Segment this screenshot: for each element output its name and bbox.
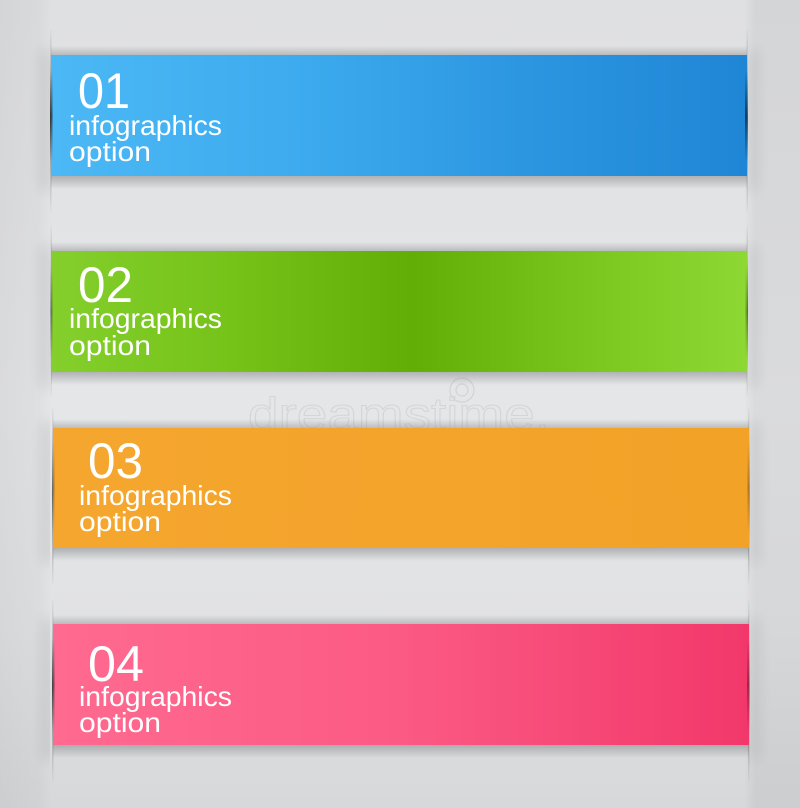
label — [79, 480, 232, 537]
number 03: 03 — [88, 433, 143, 489]
label: option — [69, 136, 151, 167]
panel: option 04 — [52, 615, 750, 758]
number 02: 02 — [78, 257, 133, 313]
bar: orange — [53, 428, 749, 548]
label: option — [69, 330, 151, 361]
label: infographics — [79, 480, 232, 511]
label: infographics — [69, 110, 222, 141]
panel: option 03 — [52, 419, 750, 561]
label: option — [79, 707, 161, 738]
panel: option 02 — [50, 242, 748, 385]
number 04: 04 — [88, 636, 144, 692]
label: infographics — [79, 681, 232, 712]
label: option — [79, 506, 161, 537]
bar: blue — [51, 55, 747, 176]
bar: green — [51, 251, 747, 372]
panel: option 01 — [50, 46, 748, 189]
label — [69, 303, 222, 361]
label — [79, 681, 232, 738]
label: infographics — [69, 303, 222, 334]
label — [69, 110, 222, 167]
bar: pink — [53, 624, 749, 745]
number 01: 01 — [78, 63, 130, 119]
watermark: dreamstime. — [248, 388, 550, 440]
